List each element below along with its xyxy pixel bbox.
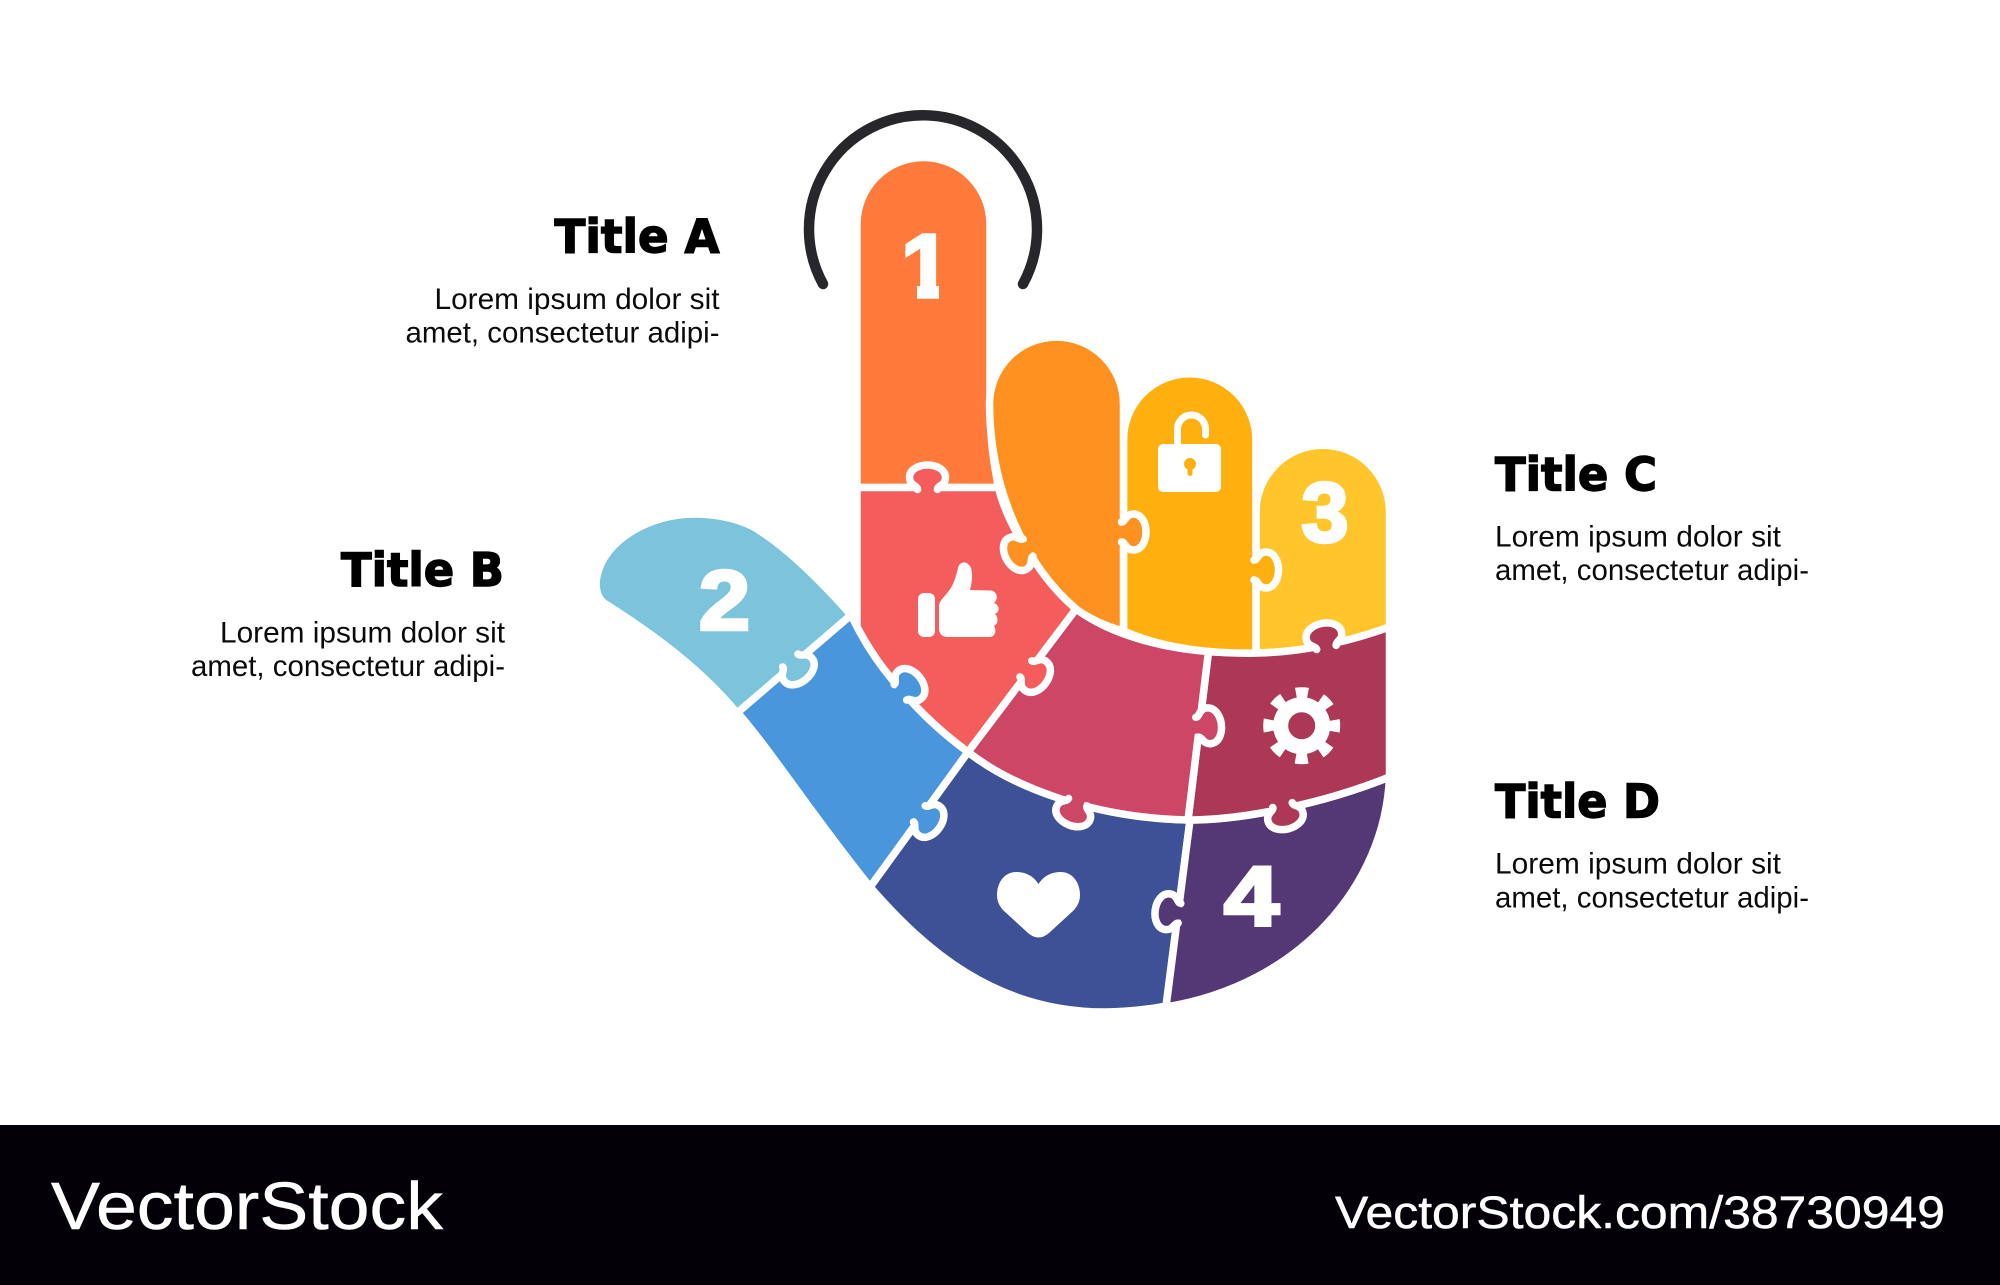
number 4: 4 — [1224, 850, 1279, 944]
puzzle piece: crimson palm section with tabs — [968, 609, 1224, 832]
puzzle piece: deep orange middle finger with tabs — [990, 337, 1146, 631]
text block: Title B: Title B — [341, 543, 504, 597]
text block: Title B: Lorem ipsum dolor sit — [220, 616, 505, 650]
text block: Title D — [1495, 775, 1809, 914]
number 1: 1 — [901, 217, 951, 317]
hand puzzle diagram — [596, 158, 1390, 1012]
text block: Title C: Lorem ipsum dolor sit — [1495, 520, 1781, 554]
text block: Title A: Lorem ipsum dolor sit — [434, 283, 720, 316]
footer image id: VectorStock.com/38730949 — [1335, 1187, 1945, 1238]
text block: Title C: Title C — [1495, 448, 1657, 502]
puzzle piece: burgundy palm section with tabs — [1188, 620, 1390, 833]
footer bar — [0, 1125, 2000, 1285]
footer brand name: VectorStock — [51, 1169, 444, 1244]
text block: Title A — [406, 210, 720, 350]
number 3: 3 — [1302, 466, 1348, 560]
text block: Title D: Title D — [1495, 775, 1660, 829]
puzzle piece: yellow little finger — [1256, 445, 1390, 653]
text block: Title D: Lorem ipsum dolor sit — [1495, 848, 1781, 880]
puzzle piece: navy palm section — [870, 752, 1190, 1012]
text block: Title B: amet, consectetur adipi- — [191, 650, 505, 683]
icon: open padlock — [1158, 415, 1221, 492]
puzzle piece: blue thumb base with tabs — [737, 615, 968, 887]
number 2: 2 — [699, 554, 750, 648]
puzzle piece: orange index finger — [857, 158, 998, 488]
icon: heart — [997, 872, 1080, 938]
puzzle piece: amber ring finger with tab — [1124, 374, 1278, 653]
puzzle piece: red palm section with tabs — [857, 465, 1076, 752]
text block: Title C: amet, consectetur adipi- — [1495, 554, 1809, 587]
puzzle piece: light blue thumb with tab — [596, 514, 851, 713]
icon: gear — [1269, 693, 1335, 759]
text block: Title A: amet, consectetur adipi- — [406, 316, 720, 350]
text block: Title D: amet, consectetur adipi- — [1495, 882, 1809, 914]
text block: Title B — [191, 543, 505, 683]
icon: thumbs up — [918, 562, 999, 637]
text block: Title C — [1495, 448, 1809, 587]
puzzle piece: purple palm section with tab — [1153, 777, 1390, 1007]
arc above the pointing finger — [809, 115, 1037, 284]
text block: Title A: Title A — [554, 210, 720, 264]
